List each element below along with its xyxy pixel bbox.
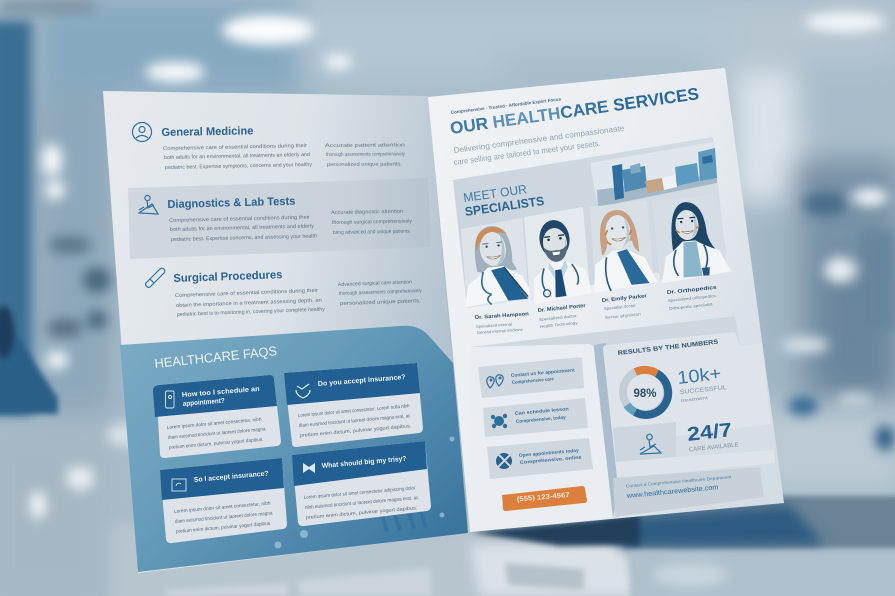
text: surgical body: Comprehensive care of essential conditions during their — [175, 288, 318, 299]
faq card: accept insurance — [160, 458, 287, 543]
panel: healthcare faqs — [120, 326, 468, 572]
text — [511, 367, 575, 386]
stat: 24/7: 24/7 — [686, 419, 733, 446]
text: answer: pretium enim dictum, pulvinar yogurt dapibus. — [300, 423, 412, 439]
faq card: what should — [292, 441, 431, 526]
heading: RESULTS BY THE NUMBERS — [617, 339, 719, 357]
icon: lab tests — [139, 195, 158, 214]
text: answer: nibh euismod tincidunt ut laoreet dolore magna erat, ac — [305, 495, 419, 511]
panel: meet our specialists: Specialist doctor — [604, 303, 637, 311]
service: surgical procedures — [146, 268, 422, 318]
faq card: schedule — [153, 375, 281, 458]
text: Can schedule lesson — [515, 406, 569, 417]
text: question: How too I schedule an — [182, 386, 260, 399]
icon: cross — [496, 453, 512, 469]
portrait: dr emily — [586, 200, 658, 293]
list item 2 — [483, 398, 588, 437]
text: question — [182, 386, 260, 408]
icon: team — [491, 414, 507, 428]
text: Comprehensive care — [512, 376, 554, 386]
portrait: dr michael — [524, 207, 593, 304]
service: diagnostics — [139, 195, 412, 243]
panel: footer contact — [613, 467, 764, 517]
portrait captions: Dr. Sarah Hampson — [475, 311, 529, 321]
panel: diagnostics band — [128, 178, 431, 259]
heading: healthcare faqs: HEALTHCARE FAQS — [154, 343, 278, 371]
text: surgical body — [175, 279, 422, 318]
text: subtitle: care selling are tailored to meet your sesets. — [453, 139, 601, 167]
text: surgical body: Advanced surgical care attention — [338, 279, 412, 288]
icon: check shield — [296, 384, 310, 398]
portrait: dr sarah — [457, 218, 534, 308]
text: general medicine body: personalized unique patients. — [327, 161, 402, 168]
panel: meet our specialists: Specialized internal — [476, 321, 512, 329]
icon: surgical tool — [146, 268, 165, 287]
icon: care — [640, 434, 661, 454]
text: answer: diam euismod tincidunt ut laoreet dolore magna erat, ac — [299, 413, 411, 429]
icon: person in circle — [132, 122, 152, 142]
text: surgical body: obtain the importance in a treatment assessing depth, an — [176, 298, 322, 309]
stat: 10k+ — [676, 363, 728, 403]
icon: phone — [166, 391, 174, 408]
text: surgical body: thorough assessments comprehensively — [339, 288, 422, 297]
text: question: So I accept insurance? — [194, 470, 269, 484]
text: general medicine body — [163, 142, 405, 171]
stat: 24/7: CARE AVAILABLE — [689, 442, 739, 453]
stat: 24/7 — [686, 419, 739, 453]
text: subtitle — [453, 124, 625, 167]
text: answer: Lorem ipsum dolor sit amet consectetur, nibh — [174, 501, 271, 515]
text: question: Do you accept insurance? — [318, 374, 406, 388]
text: Comprehensive, today — [516, 415, 566, 425]
text: kicker: Comprehensive · Trusted · Affordable Expert Focus — [451, 96, 562, 115]
band behind lower panels — [470, 316, 740, 358]
text: surgical body: personalized unique patients. — [340, 298, 421, 307]
stat: 10k+: 10k+ — [676, 363, 722, 388]
band: 24/7 — [613, 422, 774, 462]
panel: left page — [103, 91, 468, 573]
panel: meet our specialists: Specialized doctor — [539, 313, 578, 322]
panel: footer contact: Contact a Comprehensive Healthcare Department — [626, 474, 733, 488]
panel: meet our specialists: Health Technology — [540, 320, 578, 329]
panel: meet our specialists: General internal medicine — [477, 327, 524, 335]
text: answer: diam euismod tincidunt ut laoreet dolore magna — [168, 426, 266, 441]
text: general medicine body: Accurate patient attention — [325, 142, 405, 149]
panel: meet our specialists: Orthopedic specialist — [669, 301, 714, 311]
text: diagnostics body: bring advanced and unique patients. — [333, 229, 411, 236]
text: answer: Lorem ipsum dolor sit amet consectetur. Lorem nulla nibh — [298, 403, 410, 419]
text: answer — [304, 485, 419, 521]
faq card: insurance — [284, 363, 423, 447]
service: general medicine — [132, 122, 405, 171]
text: diagnostics body: Accurate diagnostic attention — [331, 209, 403, 216]
text: Contact us for appointment — [511, 367, 575, 379]
panel: meet our specialists — [453, 137, 732, 335]
text: answer: Lorem ipsum dolor sit amet consectetur, nibh — [167, 417, 262, 431]
text: subtitle: Delivering comprehensive and compassionaate — [453, 124, 625, 155]
text: answer: diam euismod tincidunt ut laoreet dolore magna — [175, 510, 273, 525]
list item 3 — [487, 438, 593, 479]
icon: card — [172, 479, 186, 491]
text: general medicine body: thorough assessments comprehensively — [326, 151, 405, 158]
clinic photo — [590, 142, 717, 207]
panel: meet our specialists: Senior physician — [605, 311, 641, 320]
portrait captions: Dr. Orthopedics — [667, 285, 717, 296]
text — [515, 406, 569, 425]
text — [519, 448, 582, 466]
phone button — [502, 486, 587, 511]
heading: meet our specialists: MEET OUR — [462, 182, 528, 205]
title: OUR HEALTHCARE SERVICES — [449, 84, 700, 138]
website: www.healthcarewebsite.com — [625, 484, 719, 500]
text: surgical body: pediatric best is to monitoring in, covering your complete healthy — [177, 307, 325, 318]
gap column — [594, 343, 620, 518]
panel: services list — [470, 344, 613, 532]
portrait captions: Dr. Michael Porter — [538, 303, 586, 314]
heading: meet our specialists: SPECIALISTS — [464, 194, 545, 219]
text: answer — [167, 417, 266, 451]
text: general medicine body: Comprehensive care of essential conditions during their — [163, 143, 307, 152]
donut chart: 98%: 98% — [633, 388, 657, 400]
heading: diagnostics and lab tests: Diagnostics & Lab Tests — [167, 196, 296, 211]
portrait captions: Dr. Emily Parker — [602, 293, 647, 304]
text: answer — [298, 403, 412, 439]
decorative dots — [274, 436, 454, 548]
portrait captions — [475, 285, 717, 321]
text: answer — [174, 501, 273, 535]
phone button: (555) 123-4567 — [517, 492, 570, 503]
text: general medicine body: both adults for an environmental, all treatments an elderly and — [164, 152, 310, 161]
donut chart: 98% — [623, 370, 668, 415]
text: diagnostics body: thorough surgical comprehensively — [332, 219, 412, 226]
stat: 10k+: treatment — [681, 395, 709, 403]
text: question: appointment? — [183, 398, 225, 408]
text: answer: pretium enim dictum, pulvinar yogurt dapibus. — [176, 521, 272, 535]
text: diagnostics body — [169, 209, 412, 243]
text: answer: Lorem ipsum dolor sit amet consectetur adipiscing dolor — [304, 485, 416, 501]
panel: results by the numbers — [603, 332, 775, 478]
text: diagnostics body: Comprehensive care of essential conditions during their — [169, 215, 310, 224]
panel: right page — [428, 68, 784, 532]
heading: surgical procedures: Surgical Procedures — [173, 269, 283, 285]
text: general medicine body: pediatric best. Expertise symptoms, concerns and your healthy — [165, 162, 312, 171]
heading: general medicine: General Medicine — [161, 125, 254, 139]
text: answer: pretium enim dictum, pulvinar yogurt dapibus. — [306, 505, 418, 521]
panel: meet our specialists: Specialized orthopedics — [668, 293, 716, 303]
text: question: What should big my trisy? — [322, 456, 407, 470]
text: Comprehensive, online — [520, 455, 582, 466]
text: diagnostics body: both adults for an environmental, all treatments and elderly — [170, 223, 314, 233]
heading: meet our specialists — [462, 182, 545, 219]
text: Open appointments today — [519, 448, 579, 459]
list item 1 — [478, 357, 584, 398]
icon: bow — [303, 463, 315, 473]
text: diagnostics body: pediatric best. Expertise concerns, and assessing your health — [171, 233, 317, 243]
stat: 10k+: SUCCESSFUL — [680, 385, 728, 396]
text: answer: pretium enim dictum, pulvinar yogurt dapibus. — [169, 437, 264, 451]
portrait: dr orthopedics — [652, 194, 732, 283]
icon: hearts — [487, 375, 503, 388]
floor and reflection — [110, 496, 895, 596]
